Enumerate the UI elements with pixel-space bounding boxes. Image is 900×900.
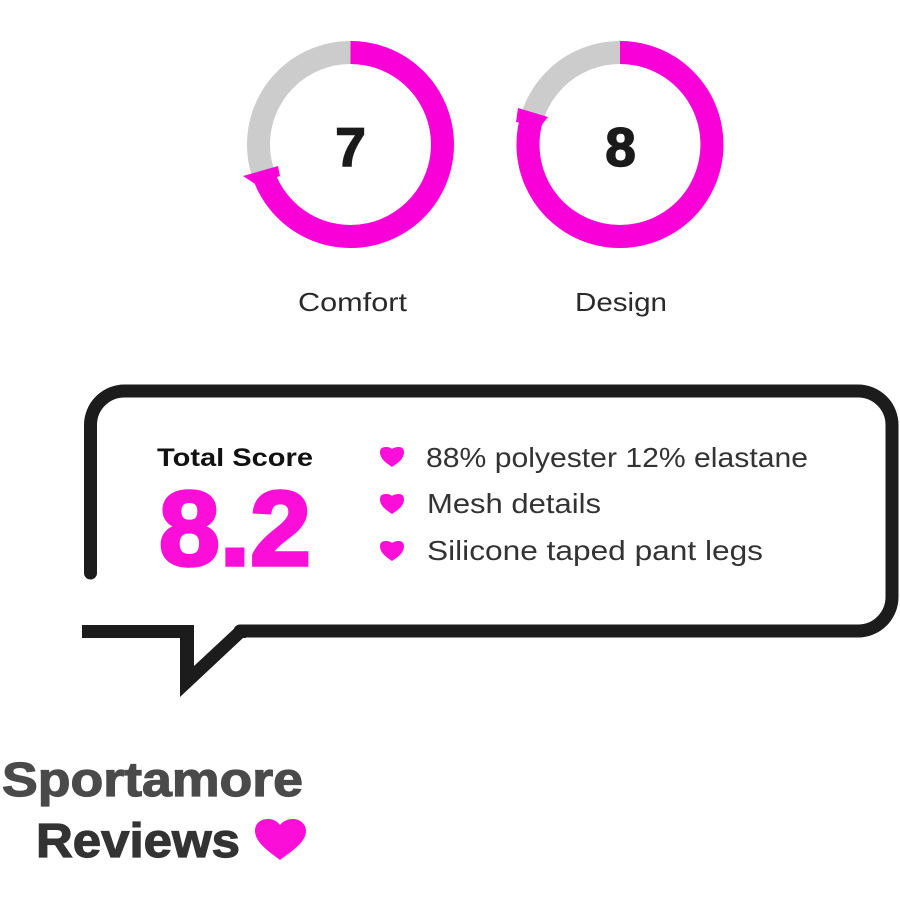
donut: design score — [516, 52, 712, 236]
design score number: 8 — [605, 116, 636, 178]
icon: heart bullet 1 — [380, 447, 404, 467]
icon: heart bullet 2 — [380, 494, 404, 514]
bubble tail — [82, 625, 246, 697]
comfort label: Comfort — [298, 287, 408, 317]
donut: comfort score — [243, 52, 442, 236]
logo line 1: Sportamore — [2, 754, 303, 807]
design ring end wedge — [516, 108, 548, 126]
speech bubble outline — [82, 391, 892, 697]
bubble body stroke — [90, 391, 892, 631]
comfort ring track — [258, 52, 442, 236]
feature list — [380, 442, 808, 566]
design ring track — [528, 52, 712, 236]
design label: Design — [575, 287, 667, 317]
comfort ring value 70% — [263, 52, 442, 236]
feature text 2: Mesh details — [427, 488, 601, 519]
design ring value 80% — [528, 52, 712, 236]
comfort score number: 7 — [335, 116, 366, 178]
feature text 1: 88% polyester 12% elastane — [426, 442, 808, 473]
logo: Sportamore Reviews — [2, 754, 306, 868]
logo line 2: Reviews — [36, 815, 240, 868]
icon: logo heart — [255, 819, 306, 860]
feature text 3: Silicone taped pant legs — [427, 535, 763, 566]
total score heading: Total Score — [157, 444, 313, 472]
total score value: 8.2 — [159, 470, 311, 588]
icon: heart bullet 3 — [380, 541, 404, 561]
comfort ring end wedge — [243, 166, 280, 184]
